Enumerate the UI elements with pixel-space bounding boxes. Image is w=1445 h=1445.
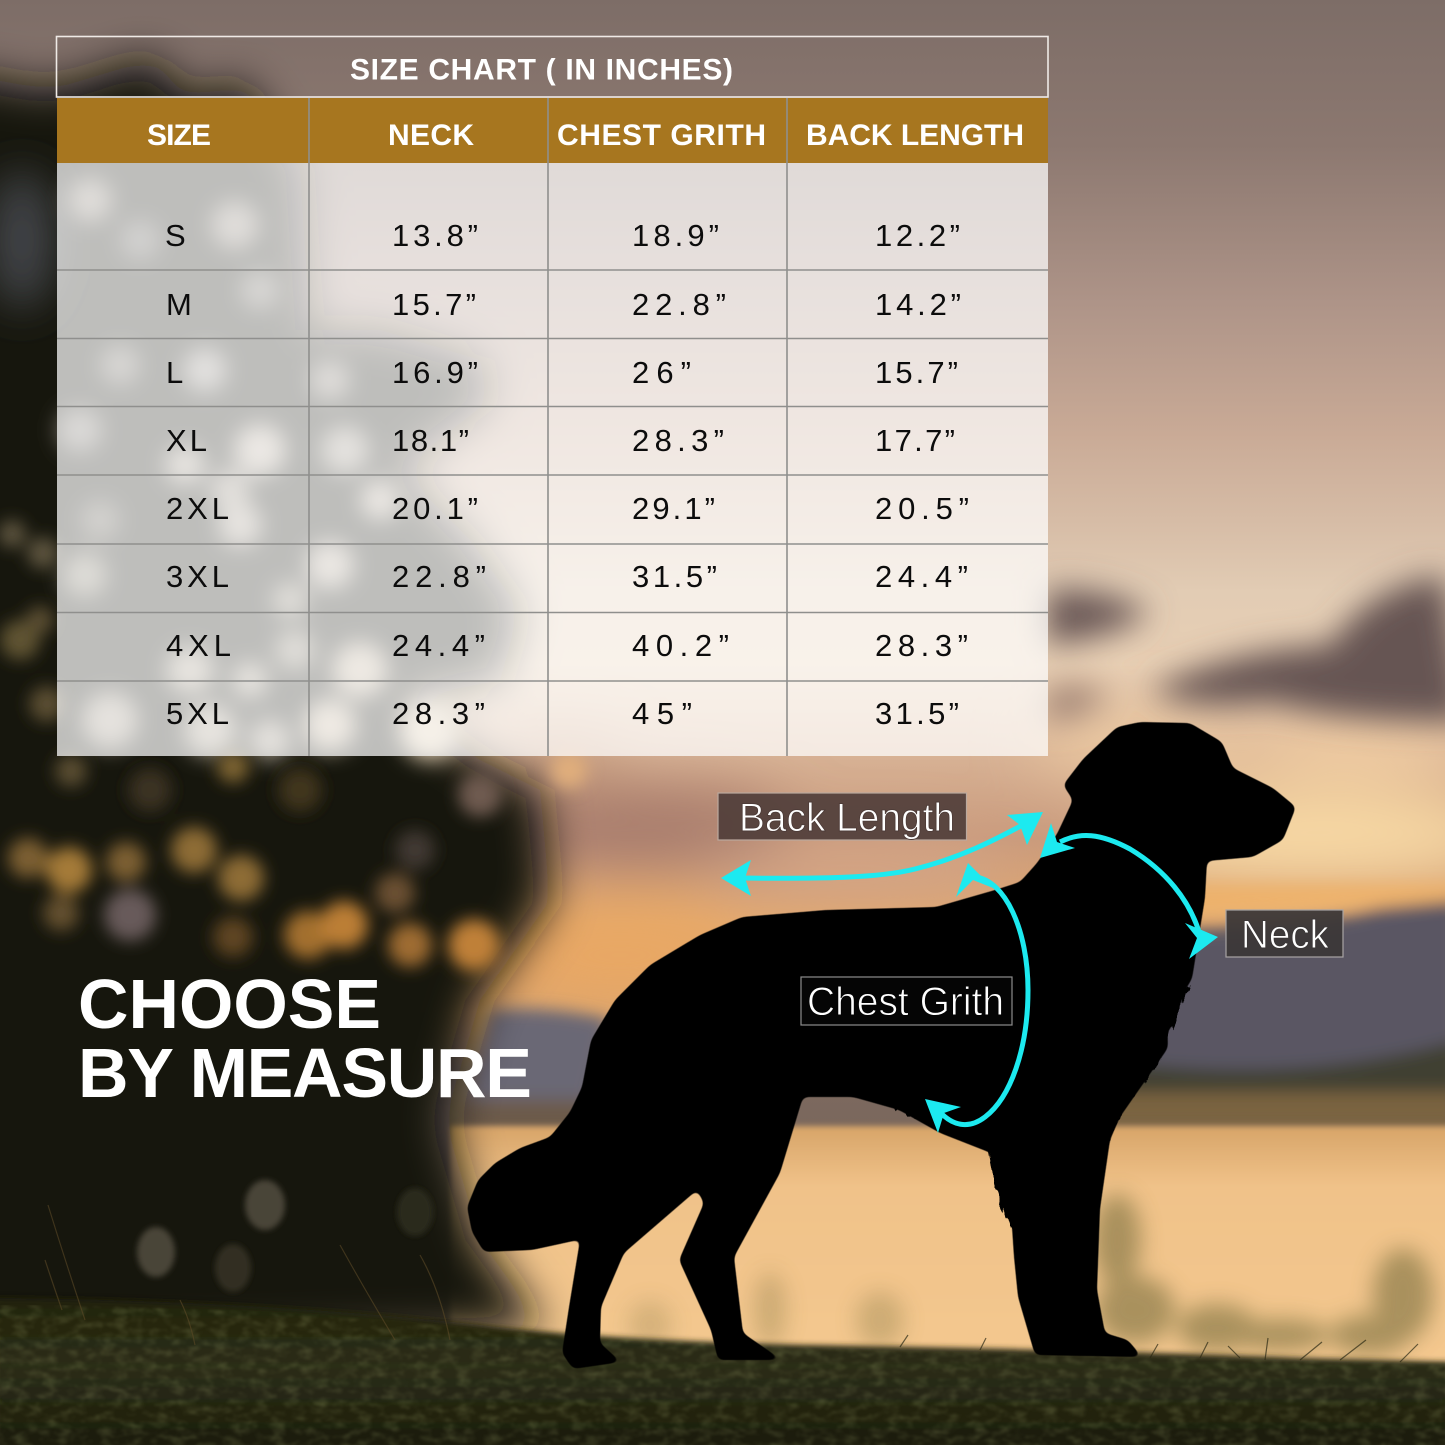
row XL: XL — [166, 423, 207, 458]
row 2XL: 29.1” — [632, 491, 715, 526]
row S: 18.9” — [632, 218, 719, 253]
row 3XL: 24.4” — [875, 559, 968, 594]
headline: BY MEASURE — [78, 1034, 532, 1112]
row XL: 17.7” — [875, 423, 955, 458]
row M: 15.7” — [392, 287, 476, 322]
table header row: SIZE — [147, 119, 211, 152]
table body panel — [57, 163, 1048, 756]
row M: 22.8” — [632, 287, 726, 322]
row S: 13.8” — [392, 218, 478, 253]
dog silhouette — [467, 722, 1296, 1369]
arrow: neck — [1040, 823, 1218, 959]
row 5XL — [166, 696, 959, 731]
label: chest grith: Chest Grith — [807, 980, 1004, 1024]
row 4XL — [166, 628, 968, 663]
row 3XL: 31.5” — [632, 559, 717, 594]
table header row: BACK LENGTH — [806, 119, 1024, 152]
headline: CHOOSE — [78, 965, 381, 1043]
chart title box: SIZE CHART ( IN INCHES) — [350, 54, 733, 86]
row 2XL: 20.1” — [392, 491, 478, 526]
row 3XL: 22.8” — [392, 559, 486, 594]
row 3XL: 3XL — [166, 559, 229, 594]
row S: 12.2” — [875, 218, 960, 253]
label: back length: Back Length — [739, 796, 955, 840]
row 2XL: 20.5” — [875, 491, 969, 526]
row 4XL: 28.3” — [875, 628, 968, 663]
row 2XL — [166, 491, 969, 526]
size table — [57, 98, 1048, 756]
table header row: NECK — [388, 119, 474, 152]
row XL: 28.3” — [632, 423, 724, 458]
label: neck: Neck — [1241, 913, 1330, 957]
headline — [78, 965, 532, 1112]
row S — [165, 218, 960, 253]
row M: M — [166, 287, 192, 322]
row 4XL: 24.4” — [392, 628, 485, 663]
row L: 15.7” — [875, 355, 958, 390]
row L — [166, 355, 958, 390]
chart title box — [56, 36, 1048, 97]
row 4XL: 40.2” — [632, 628, 729, 663]
table header row: CHEST GRITH — [557, 119, 766, 152]
row 3XL — [166, 559, 968, 594]
row L: 16.9” — [392, 355, 478, 390]
row 5XL: 45” — [632, 696, 692, 731]
row XL — [166, 423, 955, 458]
arrow: chest girth — [925, 863, 1028, 1133]
row M: 14.2” — [875, 287, 961, 322]
row 4XL: 4XL — [166, 628, 231, 663]
row 5XL: 5XL — [166, 696, 229, 731]
row L: 26” — [632, 355, 691, 390]
row M — [166, 287, 961, 322]
row 2XL: 2XL — [166, 491, 229, 526]
row 5XL: 28.3” — [392, 696, 485, 731]
table header row — [57, 98, 1048, 163]
row L: L — [166, 355, 183, 390]
row 5XL: 31.5” — [875, 696, 959, 731]
arrow: back length — [721, 812, 1043, 896]
row XL: 18.1” — [392, 423, 469, 458]
row S: S — [165, 218, 186, 253]
